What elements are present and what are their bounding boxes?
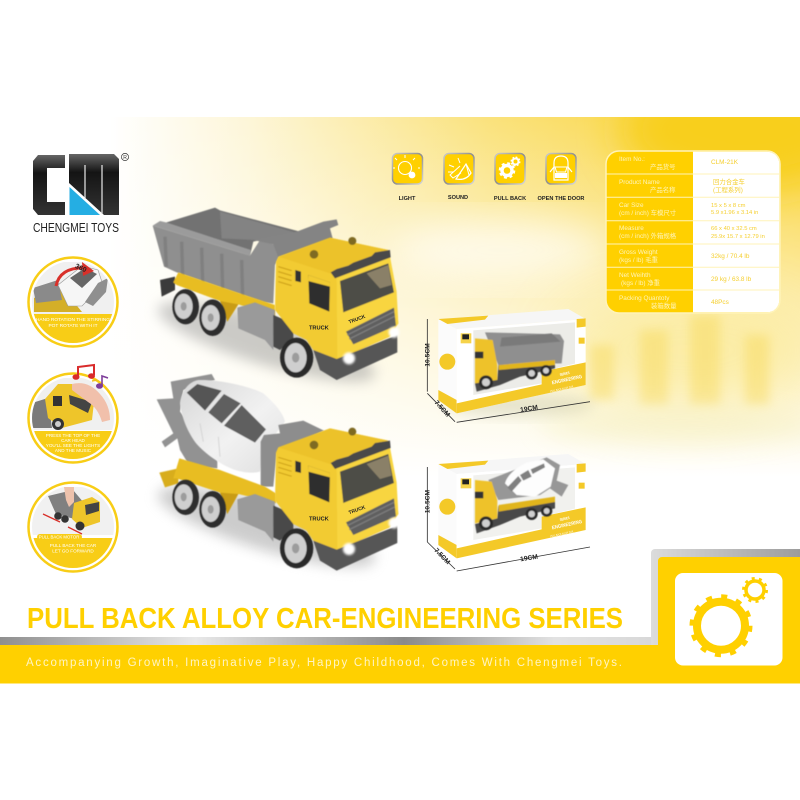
specification table: (kgs / lb) 净重 (621, 278, 661, 287)
background: yellow city haze (139, 117, 800, 464)
callout: press top of cab for lights and music: PRESS THE TOP OF THE (46, 433, 100, 438)
tagline band (0, 645, 800, 684)
specification table: Measure (619, 225, 644, 232)
feature icon: light (392, 154, 422, 202)
chassis (160, 272, 275, 322)
specification table: 15 x 5 x 8 cm (711, 203, 746, 209)
dump bed (153, 208, 338, 303)
cab: TRUCK (348, 504, 367, 516)
package box: cement mixer: 7.5CM (432, 547, 451, 566)
package box: cement mixer: 10.5CM (424, 490, 431, 513)
package box: dump truck: 7.5CM (433, 399, 451, 419)
callout: press top of cab for lights and music: CAR HEAD (61, 438, 86, 443)
panel: bottom-right gear panel frame (651, 549, 800, 646)
callout: press top of cab for lights and music: YOU'LL SEE THE LIGHTS (46, 443, 100, 448)
mixer drum (180, 380, 285, 473)
specification table: Packing Quantoty (619, 295, 670, 302)
specification table: 29 kg / 63.8 lb (711, 276, 752, 283)
callout: pull back and let go: LET GO FORWARD (52, 548, 94, 554)
boxed mixer truck (475, 457, 568, 533)
cab: TRUCK (309, 516, 330, 522)
tagline band: Accompanying Growth, Imaginative Play, Happy Childhood, Comes With Chengmei Toys. (26, 657, 622, 669)
boxed dump truck (475, 332, 564, 392)
truck: dump truck (151, 208, 399, 397)
callout: rotate the mixer 360 (28, 258, 118, 348)
callout: pull back and let go (28, 482, 118, 572)
specification table: Product Name (619, 179, 660, 186)
package box: cement mixer: PULL BACK ALLOY CAR (550, 529, 574, 538)
package box: dump truck (424, 309, 593, 422)
specification table: 产品名称 (650, 185, 676, 194)
specification table: 产品货号 (650, 162, 676, 171)
feature icon: open the door: OPEN THE DOOR (538, 196, 584, 202)
package box: cement mixer (424, 454, 590, 571)
chassis (159, 458, 276, 514)
package box: cement mixer: 19CM (520, 554, 539, 563)
rear wheels (172, 289, 226, 336)
specification table: (kgs / lb) 毛重 (619, 255, 659, 264)
specification table: CLM-21K (711, 159, 739, 166)
cab (273, 237, 399, 380)
callout: rotate the mixer 360: 360 (74, 263, 87, 274)
package box: dump truck: SERIES (559, 371, 570, 377)
feature icon: pull back (494, 154, 526, 202)
title: PULL BACK ALLOY CAR-ENGINEERING SERIES (27, 603, 623, 635)
specification table: Net Weihth (619, 272, 651, 279)
feature icon: pull back: PULL BACK (494, 196, 526, 202)
package box: dump truck: 10.5CM (424, 343, 431, 367)
icon: music notes (72, 365, 108, 389)
feature icon: open the door (538, 154, 584, 202)
specification table: 32kg / 70.4 lb (711, 253, 750, 260)
callout: rotate the mixer 360: POT ROTATE WITH IT (48, 323, 98, 329)
logo: Chengmei Toys (33, 153, 129, 235)
package box: dump truck: PULL BACK ALLOY CAR (550, 384, 574, 393)
specification table: (工程系列) (713, 185, 743, 194)
specification table (606, 151, 780, 313)
specification table: 装箱数量 (651, 301, 677, 310)
feature icon: light: LIGHT (399, 196, 416, 202)
feature icon: sound: SOUND (448, 195, 468, 201)
callout: pull back and let go: PULL BACK MOTOR (39, 534, 79, 540)
feature icon: sound (444, 154, 474, 201)
specification table: Item No.: (619, 156, 645, 163)
truck: cement mixer (151, 374, 399, 582)
specification table: 5.9 x1.96 x 3.14 in (711, 210, 758, 216)
rear wheels (172, 480, 226, 528)
specification table: 66 x 40 x 32.5 cm (711, 226, 757, 232)
specification table: 回力合金车 (713, 177, 746, 186)
package box: cement mixer: SERIES (559, 516, 570, 522)
specification table: Car Size (619, 202, 644, 209)
callout: pull back and let go: PULL BACK THE CAR (50, 543, 97, 548)
icon: gears on white card (675, 573, 782, 666)
specification table: Gross Weight (619, 249, 658, 256)
bottom metallic bar (0, 637, 652, 646)
mixer rear frame (157, 374, 217, 468)
logo: Chengmei Toys: R (123, 155, 127, 161)
specification table: 48Pcs (711, 299, 729, 306)
package box: cement mixer: ENGINEERING (551, 519, 583, 531)
truck: dump truck: TRUCK (348, 314, 367, 326)
callout: press top of cab for lights and music (28, 365, 118, 465)
specification table: 25.9x 15.7 x 12.79 in (711, 234, 765, 240)
truck: dump truck: TRUCK (309, 326, 330, 332)
package box: dump truck: 19CM (520, 404, 539, 414)
water tank (261, 421, 324, 487)
callout: rotate the mixer 360: HAND ROTATION THE STIRRING (36, 317, 110, 323)
package box: dump truck: ENGINEERING (551, 374, 583, 386)
fuel tank (237, 494, 275, 542)
cab (273, 428, 399, 571)
callout: press top of cab for lights and music: AND THE MUSIC (55, 448, 92, 453)
specification table: (cm / inch) 车模尺寸 (619, 208, 677, 217)
specification table: (cm / inch) 外箱规格 (619, 231, 677, 240)
logo: Chengmei Toys: CHENGMEI TOYS (33, 221, 119, 235)
fuel tank (237, 302, 275, 350)
